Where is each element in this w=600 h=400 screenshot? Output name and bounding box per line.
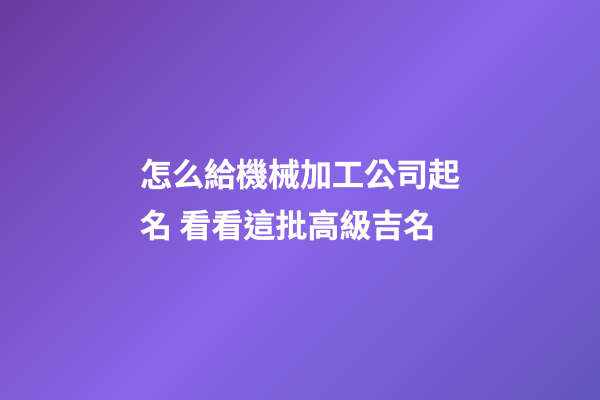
title: 怎么給機械加工公司起 xyxy=(140,157,460,193)
title: 名 看看這批高級吉名 xyxy=(140,208,435,244)
title xyxy=(140,157,460,244)
